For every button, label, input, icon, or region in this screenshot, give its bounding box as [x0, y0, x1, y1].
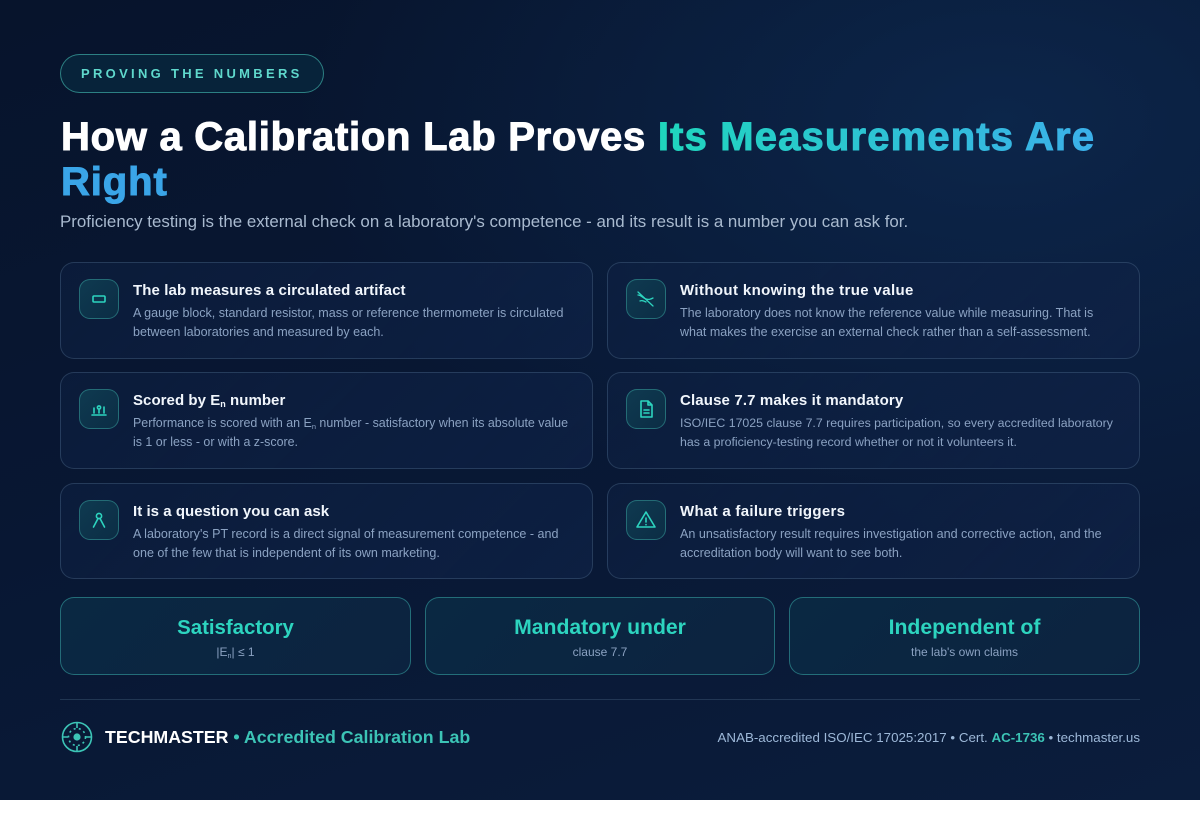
- stat: satisfactory: Satisfactory: [177, 617, 294, 639]
- card heading: What a failure triggers: [680, 503, 845, 520]
- footer brand: TECHMASTER • Accredited Calibration Lab: [105, 727, 470, 747]
- eyebrow pill: [60, 54, 324, 93]
- panel: clause 7.7: [607, 372, 1140, 469]
- icon: gauges: [79, 389, 119, 429]
- card text: A laboratory's PT record is a direct signal of measurement competence - and: [133, 527, 558, 541]
- card text: [680, 527, 1102, 560]
- stat: independent of: the lab's own claims: [911, 645, 1018, 659]
- stat: independent of: [789, 597, 1140, 675]
- stat: mandatory under: [425, 597, 775, 675]
- panel: without true value: [607, 262, 1140, 359]
- title: How a Calibration Lab Proves Its Measurements Are: [61, 115, 1095, 159]
- title: Right: [61, 160, 168, 204]
- card text: [133, 527, 558, 560]
- icon: crossed wave: [626, 279, 666, 319]
- card heading: It is a question you can ask: [133, 503, 329, 520]
- panel: circulated artifact: [60, 262, 593, 359]
- icon: artifact block: [79, 279, 119, 319]
- card heading: Without knowing the true value: [680, 282, 914, 299]
- panel: question to ask: [60, 483, 593, 579]
- card text: one of the few that is independent of its own marketing.: [133, 546, 440, 560]
- card text: ISO/IEC 17025 clause 7.7 requires participation, so every accredited laboratory: [680, 416, 1113, 430]
- card heading: Clause 7.7 makes it mandatory: [680, 392, 903, 409]
- icon: logo target: [62, 722, 92, 752]
- card text: [680, 416, 1113, 449]
- card text: what makes the exercise an external check rather than a self-assessment.: [680, 325, 1091, 339]
- stat: satisfactory: [60, 597, 411, 675]
- panel: En number: [60, 372, 593, 469]
- stat: independent of: Independent of: [889, 616, 1040, 639]
- card text: An unsatisfactory result requires investigation and corrective action, and the: [680, 527, 1102, 541]
- footer credentials: ANAB-accredited ISO/IEC 17025:2017 • Cert. AC-1736 • techmaster.us: [718, 730, 1140, 745]
- subtitle: Proficiency testing is the external check on a laboratory's competence - and its result is a number you can ask for.: [60, 212, 908, 231]
- icon: compass: [79, 500, 119, 540]
- card heading: The lab measures a circulated artifact: [133, 282, 406, 299]
- stat: satisfactory: |En| ≤ 1: [216, 645, 255, 660]
- card text: [133, 306, 563, 339]
- icon: document: [626, 389, 666, 429]
- panel: failure triggers: [607, 483, 1140, 579]
- card heading: Scored by En number: [133, 392, 285, 409]
- card text: has a proficiency-testing record whether or not it volunteers it.: [680, 435, 1017, 449]
- card text: is 1 or less - or with a z-score.: [133, 435, 298, 449]
- stat: mandatory under: clause 7.7: [573, 645, 627, 659]
- card text: A gauge block, standard resistor, mass or reference thermometer is circulated: [133, 306, 563, 320]
- card text: [680, 306, 1093, 339]
- card text: The laboratory does not know the reference value while measuring. That is: [680, 306, 1093, 320]
- card text: [133, 416, 568, 449]
- card text: between laboratories and measured by each.: [133, 325, 384, 339]
- card text: accreditation body will want to see both.: [680, 546, 902, 560]
- eyebrow pill: PROVING THE NUMBERS: [81, 66, 303, 81]
- title: [61, 115, 1095, 204]
- stat: mandatory under: Mandatory under: [514, 616, 686, 639]
- icon: warning triangle: [626, 500, 666, 540]
- card text: Performance is scored with an En number - satisfactory when its absolute value: [133, 416, 568, 431]
